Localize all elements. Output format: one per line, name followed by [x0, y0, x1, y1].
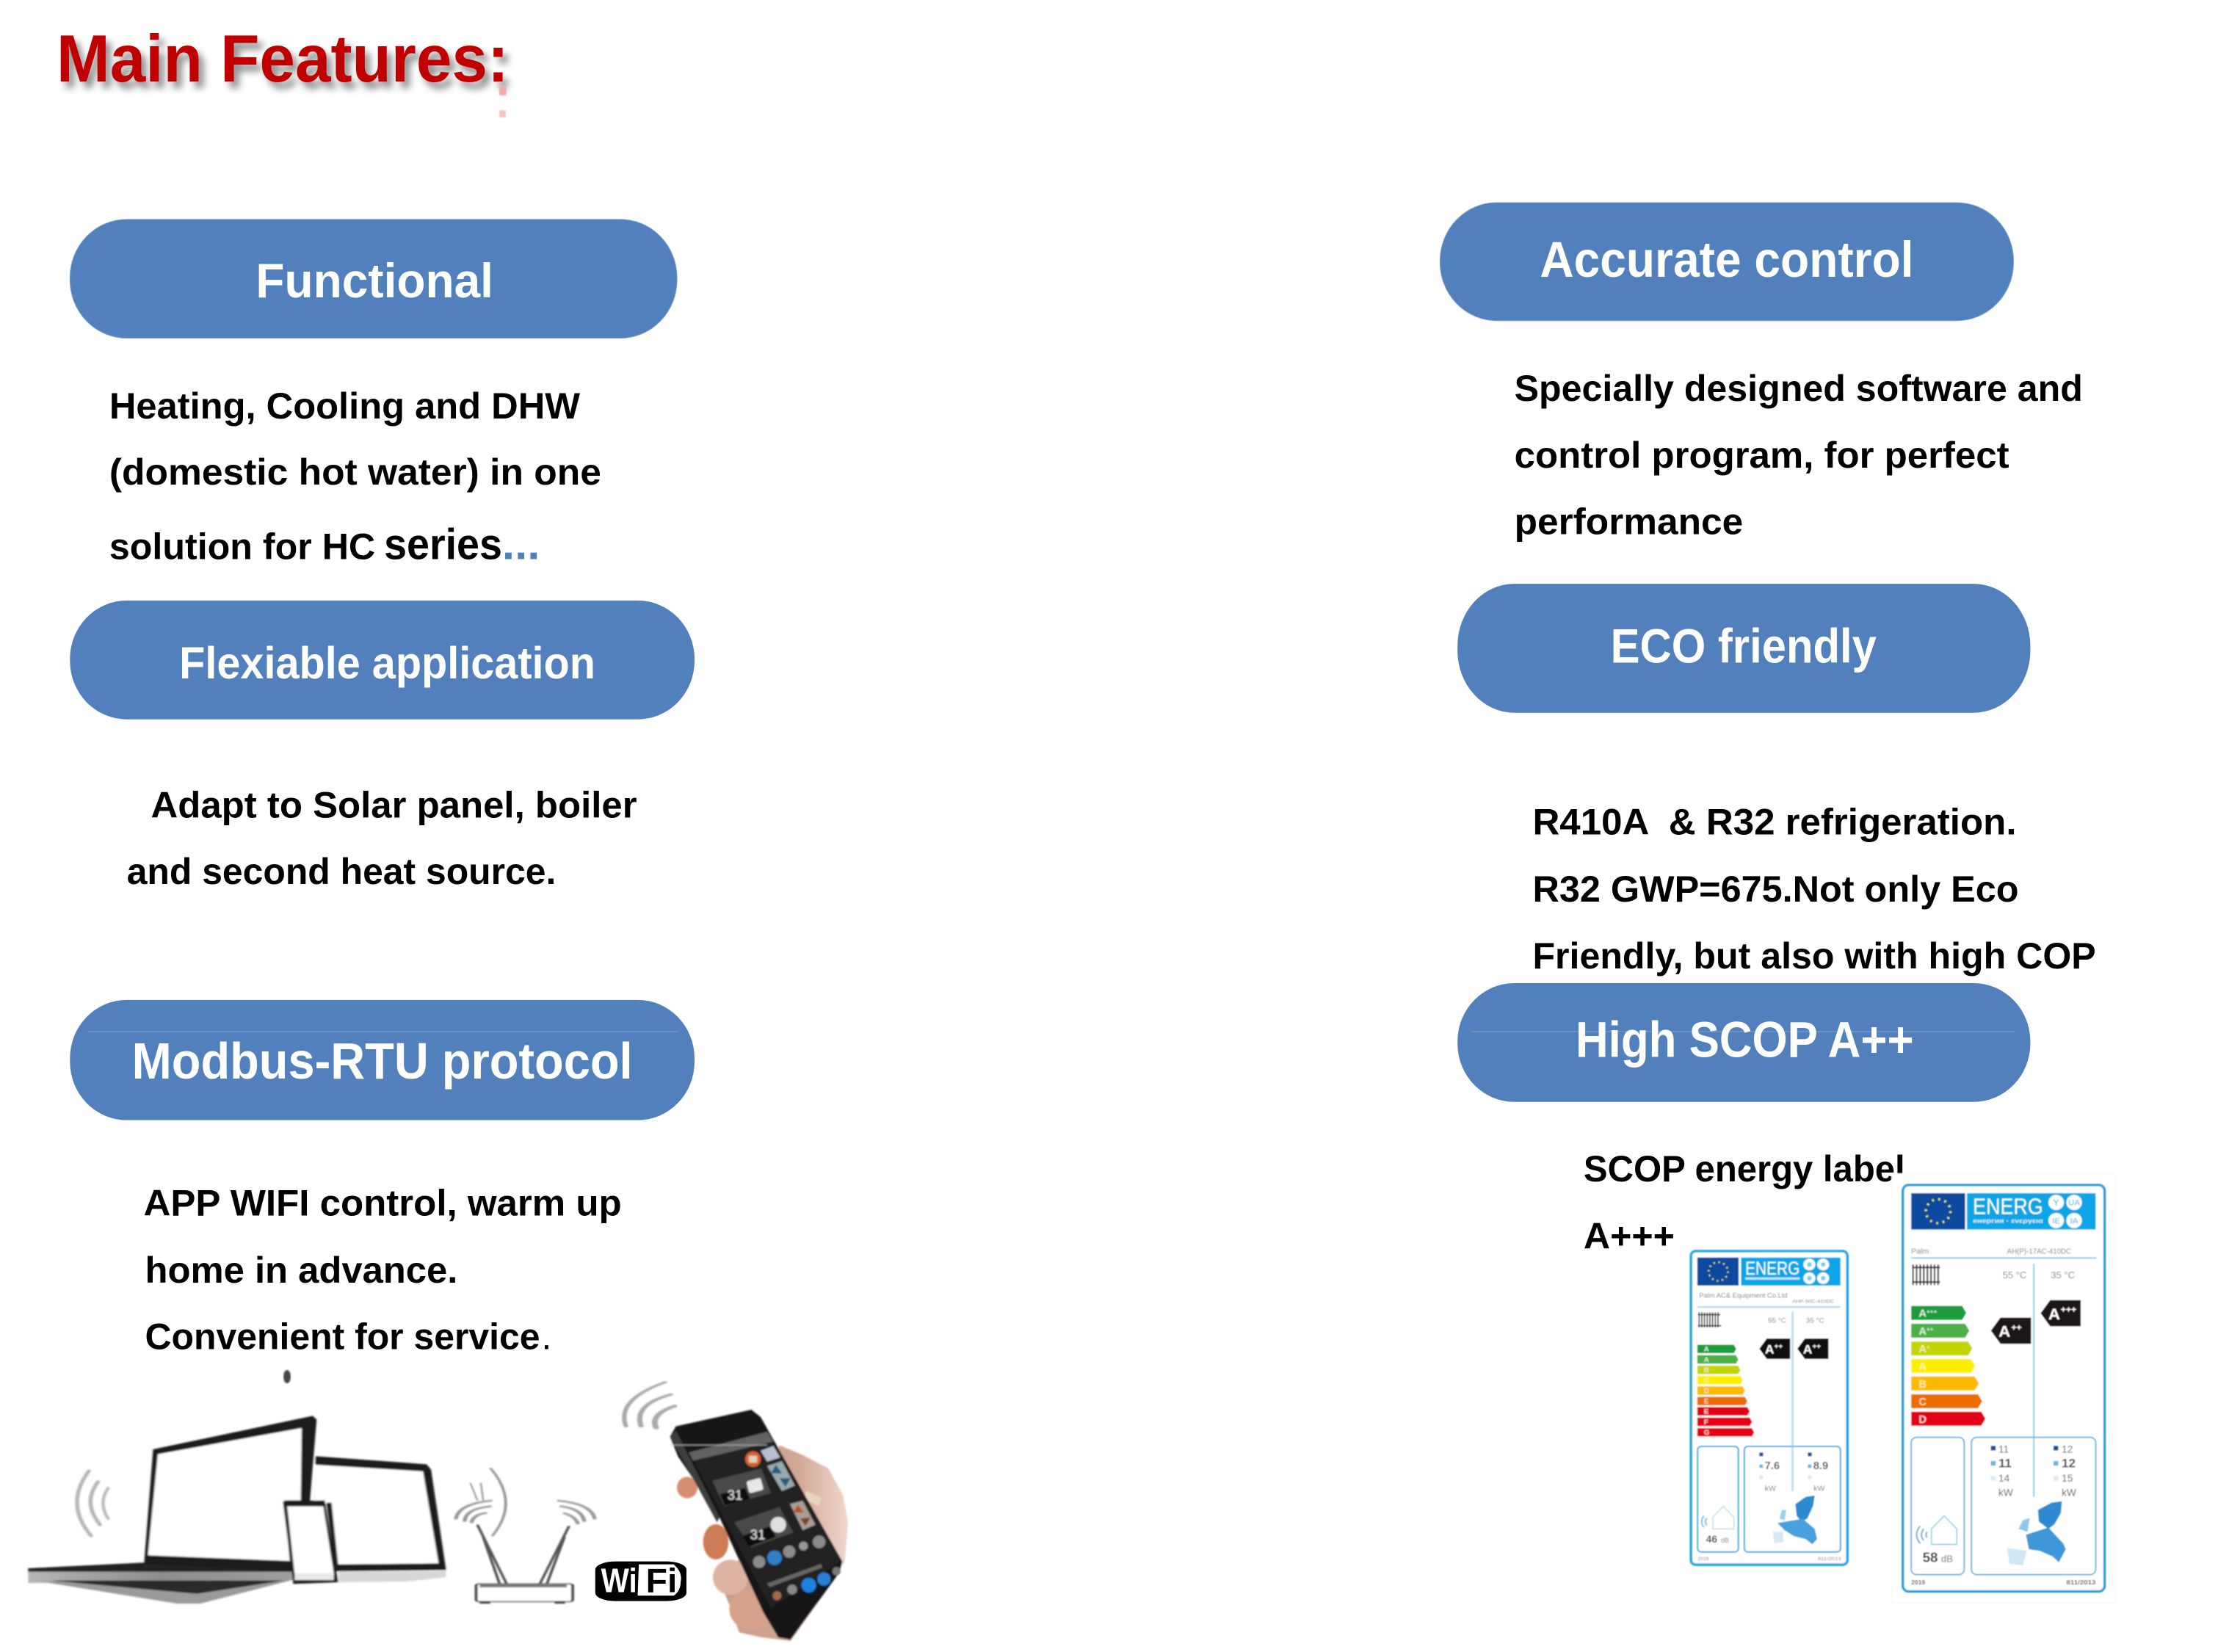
- large label output box: 14: [1998, 1473, 2010, 1484]
- small label noise box: dB: [1721, 1537, 1729, 1544]
- text: eco description: Friendly, but also with high COP: [1532, 935, 2096, 977]
- text: scop description: A+++: [1584, 1215, 1675, 1256]
- heading pill: flexiable application: [70, 601, 695, 720]
- large label efficiency scale: B: [1918, 1379, 1927, 1391]
- large label efficiency scale: A: [1918, 1361, 1927, 1373]
- small label maker: [1697, 1292, 1841, 1308]
- small label efficiency scale: E: [1704, 1398, 1709, 1406]
- heading pill: accurate control: Accurate control: [1540, 231, 1914, 288]
- text: scop description: [1584, 1148, 1905, 1256]
- illustration: devices, router, wifi and phone: [28, 1370, 848, 1641]
- fingers: [677, 1477, 697, 1499]
- large label temperatures: 55 °C: [2003, 1269, 2026, 1280]
- small label frame: [1691, 1251, 1847, 1565]
- large label efficiency scale: A: [1918, 1308, 1927, 1320]
- large label efficiency scale: +++: [1927, 1308, 1938, 1315]
- large label maker and model: Palm: [1911, 1248, 1929, 1256]
- energy label: small: [1691, 1251, 1847, 1565]
- large label efficiency scale: A: [1918, 1344, 1927, 1355]
- large label radiator: [1912, 1264, 1940, 1285]
- large label rating arrows: +++: [2061, 1305, 2076, 1314]
- text: functional description: Heating, Cooling and DHW: [109, 385, 580, 427]
- heading pill: accurate control: [1440, 203, 2014, 321]
- hand back: [720, 1445, 848, 1641]
- icon: wi-fi logo: Fi: [646, 1562, 677, 1599]
- small label efficiency scale: F: [1704, 1419, 1708, 1427]
- small label rating arrows: ++: [1812, 1343, 1821, 1351]
- large label noise box: dB: [1941, 1554, 1953, 1565]
- artifact line: [670, 1444, 767, 1446]
- large label energ banner: Y: [2054, 1198, 2059, 1208]
- large label efficiency scale: A: [1918, 1326, 1927, 1338]
- large label output box: kW: [2062, 1488, 2076, 1498]
- small label footer: 811/2013: [1818, 1557, 1841, 1562]
- large label efficiency scale: ++: [1927, 1326, 1934, 1333]
- large label footer: [1911, 1579, 2096, 1586]
- icon: antenna speck: [283, 1370, 291, 1383]
- small label energ banner: ENERG: [1745, 1258, 1799, 1279]
- large label rating arrows: A: [2048, 1305, 2060, 1323]
- icon: hand holding smartphone: 31: [750, 1527, 765, 1543]
- icon: laptops and tablet: [28, 1416, 446, 1604]
- small label efficiency scale: B: [1704, 1366, 1709, 1374]
- small label footer: [1698, 1557, 1841, 1562]
- laptop base metal strip: [28, 1572, 293, 1583]
- text: functional description: [109, 385, 601, 568]
- small label temperatures: [1768, 1312, 1824, 1491]
- large label output box: 12: [2062, 1444, 2073, 1454]
- heading pill: high scop a++: [1457, 983, 2030, 1102]
- large label maker and model: [1911, 1248, 2096, 1258]
- icon: router: [456, 1468, 595, 1604]
- text: scop description: SCOP energy label: [1584, 1148, 1905, 1189]
- base shadow strip right: [338, 1571, 446, 1582]
- phone side highlight: [670, 1430, 720, 1522]
- panel: modbus: [70, 1000, 695, 1357]
- small label efficiency scale: D: [1704, 1387, 1709, 1395]
- large label energ banner: IA: [2070, 1217, 2078, 1225]
- small label efficiency scale: G: [1704, 1429, 1709, 1437]
- large label footer: 811/2013: [2066, 1579, 2096, 1586]
- icon: hand holding smartphone: 31: [728, 1488, 742, 1503]
- large label noise box: 58: [1923, 1550, 1938, 1565]
- small label rating arrows: A: [1765, 1343, 1774, 1356]
- large label rating arrows: A: [1998, 1322, 2010, 1341]
- small label eu flag: [1697, 1258, 1739, 1286]
- large label eu flag: [1911, 1193, 1965, 1230]
- small label output box: [1744, 1446, 1841, 1552]
- heading pill: modbus-rtu protocol: [70, 1000, 695, 1120]
- heading pill: eco friendly: [1457, 584, 2030, 713]
- small label efficiency scale: E: [1704, 1408, 1709, 1416]
- large label efficiency scale: D: [1918, 1414, 1927, 1426]
- large label output box: kW: [1998, 1488, 2013, 1498]
- small label noise box: 46: [1706, 1534, 1717, 1545]
- small label output box: kW: [1813, 1485, 1825, 1493]
- text: application description: Adapt to Solar panel, boiler: [151, 785, 637, 826]
- small label efficiency scale: C: [1704, 1377, 1709, 1385]
- text: accurate control description: [1515, 368, 2083, 543]
- large label energ banner: [1967, 1193, 2095, 1230]
- small label output box: kW: [1765, 1485, 1776, 1493]
- large label frame: [1903, 1185, 2105, 1592]
- text: functional description: (domestic hot water) in one: [109, 452, 601, 493]
- large label energ banner: ENERG: [1973, 1195, 2043, 1219]
- text: accurate control description: Specially designed software and: [1515, 368, 2083, 409]
- large label temperatures: [2003, 1264, 2075, 1497]
- small label maker: Palm AC& Equipment Co.Ltd: [1699, 1292, 1788, 1300]
- small label maker: AHP-50C-410DC: [1792, 1299, 1835, 1304]
- energy label: large: [1891, 1173, 2116, 1604]
- text: accurate control description: performance: [1515, 501, 1743, 543]
- laptop base top: [28, 1562, 293, 1573]
- small label rating arrows: ++: [1775, 1343, 1783, 1351]
- heading pill: flexiable application: Flexiable application: [179, 638, 595, 689]
- small label radiator: [1698, 1312, 1721, 1327]
- heading pill: modbus-rtu protocol: Modbus-RTU protocol: [132, 1032, 633, 1090]
- small label efficiency scale: A: [1704, 1346, 1709, 1354]
- badge: [745, 1452, 761, 1467]
- large label backing: [1891, 1173, 2116, 1604]
- icon: phone signal waves: [624, 1383, 675, 1428]
- heading pill: high scop a++: High SCOP A++: [1576, 1011, 1914, 1068]
- large label energ banner: IE: [2052, 1217, 2060, 1225]
- small phone: [283, 1500, 338, 1584]
- large label footer: 2019: [1911, 1579, 1925, 1586]
- heading pill: eco friendly: ECO friendly: [1611, 619, 1877, 673]
- large label energ banner: енергия · ενεργεια: [1973, 1218, 2043, 1224]
- text: eco description: [1532, 802, 2096, 977]
- text: modbus description: [144, 1183, 622, 1357]
- small label noise box: [1697, 1446, 1739, 1552]
- heading pill: functional: Functional: [255, 254, 493, 308]
- icon row 2: [772, 1591, 781, 1600]
- text: application description: and second heat source.: [127, 851, 556, 892]
- icon: wi-fi logo: [595, 1562, 686, 1601]
- large label maker and model: AH(P)-17AC-410DC: [2007, 1248, 2071, 1256]
- large label rating arrows: [1991, 1300, 2081, 1344]
- screen header: [689, 1432, 773, 1460]
- laptop signal waves: [77, 1471, 108, 1536]
- text: functional description: ...: [502, 519, 540, 568]
- title: Main Features:: [57, 22, 509, 96]
- large label output box: 11: [1998, 1444, 2009, 1454]
- panel: flexible application: [70, 601, 695, 892]
- large label output box: 15: [2062, 1473, 2073, 1484]
- orange arrow tile: [790, 1501, 816, 1530]
- heading pill: functional: [70, 220, 677, 338]
- icon: wi-fi logo: Wi: [601, 1562, 637, 1599]
- divider row: [767, 1564, 822, 1587]
- blue arrow tile: [767, 1461, 795, 1491]
- text: functional description: solution for HC: [109, 526, 375, 567]
- panel: accurate control: [1440, 203, 2083, 543]
- icon: hand holding smartphone: [670, 1410, 848, 1641]
- large label temperatures: 35 °C: [2051, 1269, 2075, 1280]
- large label energ banner: UA: [2068, 1199, 2081, 1208]
- small label efficiency scale: A: [1704, 1356, 1709, 1364]
- laptop base underside: [51, 1581, 284, 1594]
- small label temperatures: 55 °C: [1768, 1317, 1786, 1325]
- large label rating arrows: ++: [2011, 1322, 2022, 1333]
- small label energ banner: [1741, 1258, 1841, 1286]
- large label output box: 11: [1998, 1457, 2012, 1471]
- clock tile 1: [712, 1468, 771, 1507]
- second laptop screen: [314, 1456, 446, 1571]
- phone body: [670, 1410, 842, 1640]
- small label rating arrows: A: [1803, 1343, 1812, 1356]
- large label output box: 12: [2062, 1457, 2076, 1471]
- text: eco description: R410A & R32 refrigeration.: [1532, 802, 2017, 843]
- text: application description: [127, 785, 637, 892]
- icon row 1: [753, 1556, 765, 1568]
- large label efficiency scale: +: [1927, 1344, 1930, 1350]
- main laptop screen: [144, 1416, 316, 1571]
- app tile top: [761, 1446, 780, 1462]
- laptop base lower lip: [40, 1580, 293, 1604]
- screen panel: [689, 1432, 841, 1608]
- text: modbus description: home in advance.: [145, 1250, 457, 1291]
- large label efficiency scale: [1911, 1306, 1985, 1426]
- small label output box: 7.6: [1765, 1460, 1780, 1472]
- small label output box: 8.9: [1813, 1460, 1828, 1472]
- text: eco description: R32 GWP=675.Not only Eco: [1532, 869, 2019, 910]
- small label temperatures: 35 °C: [1806, 1317, 1824, 1325]
- panel: high scop: [1457, 983, 2030, 1256]
- large label noise box: [1911, 1438, 1964, 1575]
- small label efficiency scale: [1697, 1344, 1754, 1437]
- text: accurate control description: control program, for perfect: [1515, 435, 2009, 476]
- small label rating arrows: [1759, 1338, 1829, 1359]
- panel: functional: [70, 220, 677, 568]
- text: modbus description: APP WIFI control, warm up: [144, 1183, 622, 1224]
- panel: eco friendly: [1457, 584, 2096, 977]
- text: modbus description: .: [542, 1316, 551, 1357]
- text: functional description: series: [384, 519, 502, 568]
- text: modbus description: Convenient for service: [145, 1316, 540, 1357]
- large label efficiency scale: C: [1918, 1396, 1927, 1408]
- large label output box: [1971, 1438, 2095, 1575]
- small label footer: 2019: [1698, 1557, 1709, 1562]
- clock tile 2: [734, 1507, 794, 1547]
